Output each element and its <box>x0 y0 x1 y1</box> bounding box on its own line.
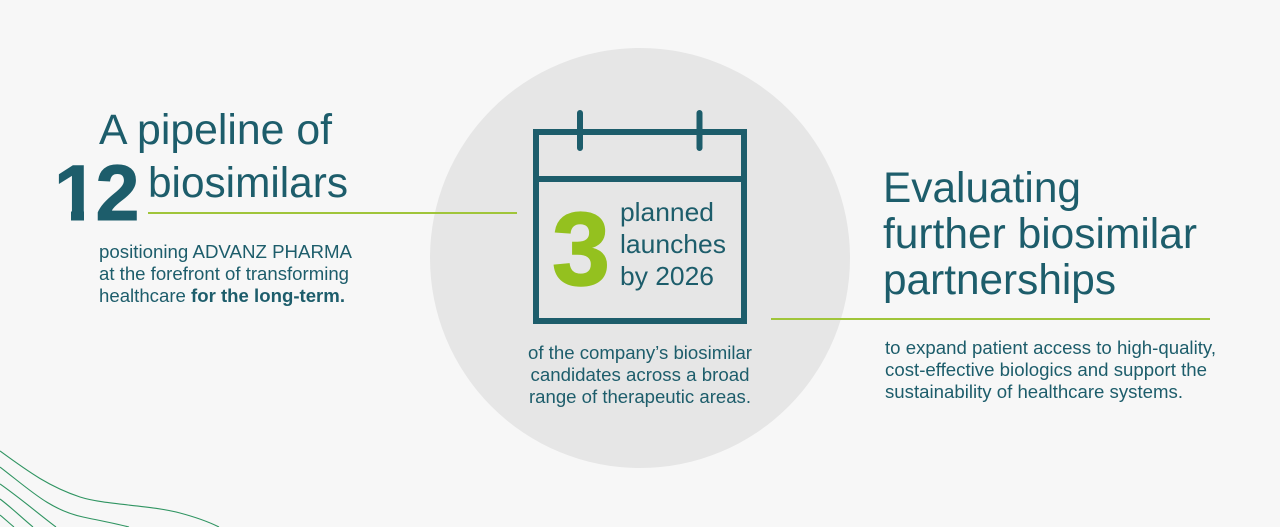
right heading: partnerships <box>883 256 1116 304</box>
left body text: healthcare for the long-term. <box>99 286 345 306</box>
big number 12: 2 <box>96 148 139 237</box>
right panel: further partnerships <box>771 164 1216 402</box>
heading: biosimilars: biosimilars <box>148 159 348 207</box>
right body text: to expand patient access to high-quality, <box>885 338 1216 358</box>
central body text: candidates across a broad <box>530 365 750 385</box>
big number 12 <box>58 164 137 220</box>
right body text: cost-effective biologics and support the <box>885 360 1207 380</box>
right body text <box>885 338 1216 402</box>
right heading <box>883 164 1197 304</box>
right body text: sustainability of healthcare systems. <box>885 382 1183 402</box>
right heading: further biosimilar <box>883 210 1197 258</box>
central body text: of the company’s biosimilar <box>528 343 752 363</box>
central circle <box>430 48 850 468</box>
calendar panel <box>528 113 752 407</box>
left body text: at the forefront of transforming <box>99 264 349 284</box>
decorative wave lines <box>0 451 219 527</box>
heading: A pipeline of: A pipeline of <box>99 106 333 154</box>
right green rule <box>771 318 1210 320</box>
planned launches text: launches <box>620 229 726 259</box>
left body text: positioning ADVANZ PHARMA <box>99 242 352 262</box>
central body text: range of therapeutic areas. <box>529 387 751 407</box>
icon: calendar <box>536 113 744 321</box>
left green rule <box>148 212 517 214</box>
right heading: Evaluating <box>883 164 1081 212</box>
left panel: pipeline of 12 biosimilars <box>54 106 517 306</box>
big number 3: 3 <box>552 192 610 308</box>
planned launches text: by 2026 <box>620 261 714 291</box>
planned launches text: planned <box>620 197 714 227</box>
central body text <box>528 343 752 407</box>
planned launches text <box>620 197 726 291</box>
left body text <box>99 242 352 306</box>
big number 12: 1 <box>54 148 98 237</box>
